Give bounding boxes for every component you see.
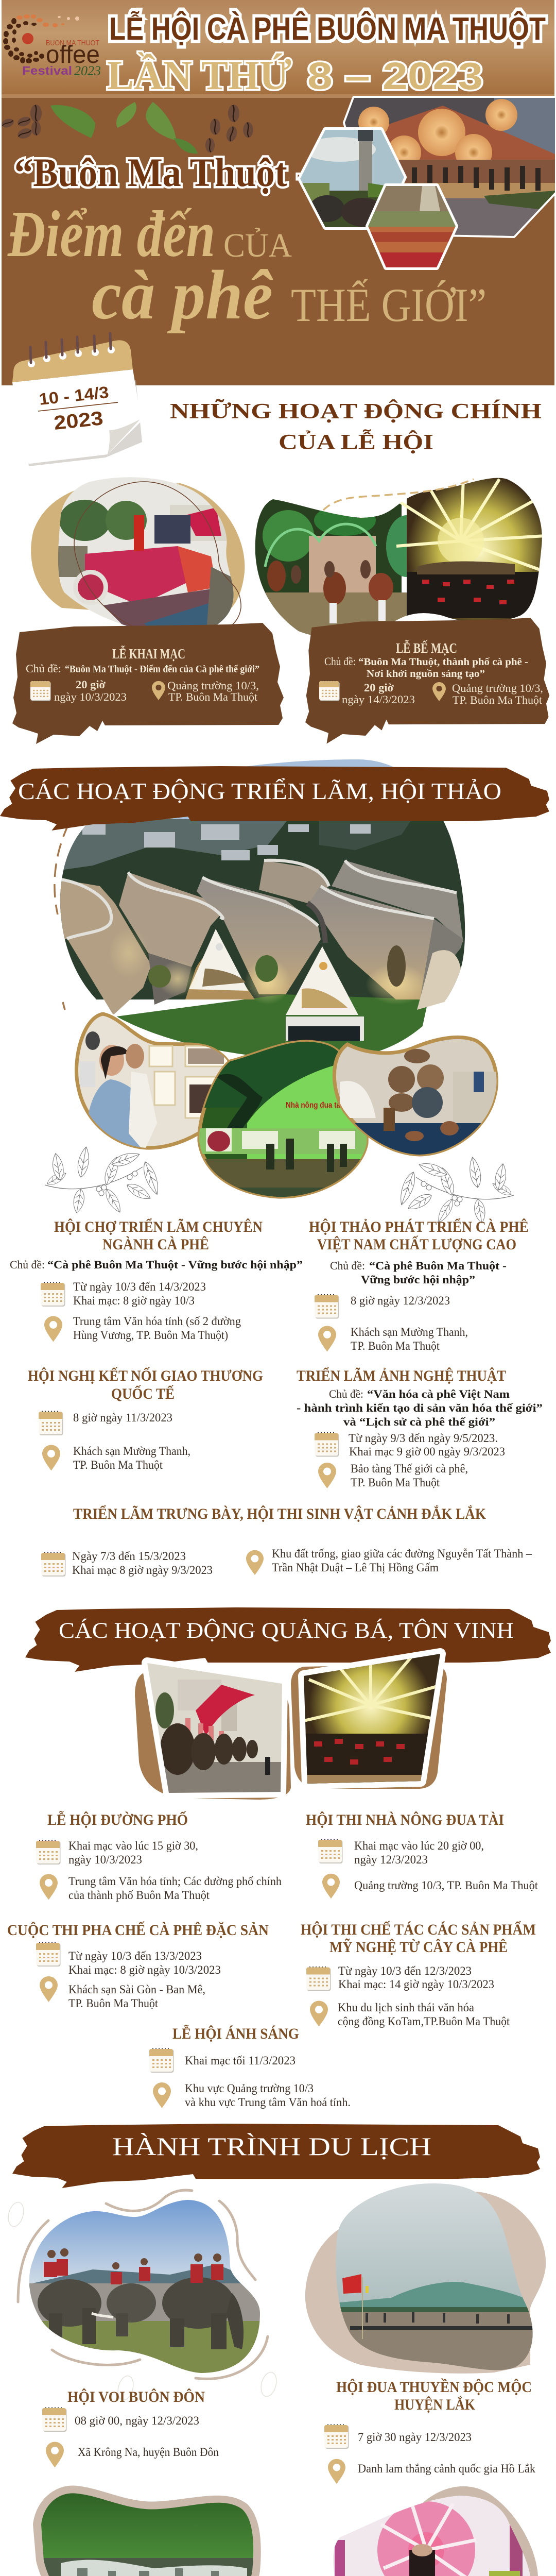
heading [28,1367,263,1402]
date [68,1839,198,1866]
photo: gallery visitors [77,1014,234,1154]
panel: Buon Don elephant festival [6,2190,279,2468]
location [68,1875,282,1902]
logo: Buon Ma Thuot Coffee Festival: offee [46,41,100,69]
dates [349,1432,505,1458]
location: Quảng trường 10/3, [452,682,543,694]
panel: Lak canoe race [305,2179,546,2484]
location: TP. Buôn Ma Thuột [453,693,542,706]
theme: “Văn hóa cà phê Việt Nam [367,1387,510,1400]
heading: main activities [170,399,542,454]
dates: Khai mạc 8 giờ ngày 9/3/2023 [72,1564,213,1577]
location [272,1547,532,1574]
caption theme [324,655,528,680]
icon: calendar [36,1840,61,1865]
photo: coffee museum [55,757,468,1066]
heading: LỄ HỘI ĐƯỜNG PHỐ [47,1811,188,1828]
location: TP. Buôn Ma Thuột [351,1340,440,1352]
caption banner [12,623,284,744]
heading: HỘI VOI BUÔN ĐÔN [67,2388,205,2405]
caption theme [26,662,259,675]
theme: “Cà phê Buôn Ma Thuột - Vững bước hội nhập” [47,1258,303,1271]
panel: farmers contest [306,1811,538,1899]
dates [73,1280,206,1307]
location [73,1445,190,1471]
photo: opening float [31,474,245,639]
icon: calendar [315,1294,339,1319]
slogan line 2: CỦA [223,227,292,264]
panel: specialty coffee contest [7,1921,269,2010]
heading: LỄ HỘI ÁNH SÁNG [172,2025,299,2042]
panel: Dam San opera [329,2486,538,2576]
icon: calendar [306,1967,331,1991]
photo: elephant race [6,2190,279,2402]
icon: calendar with date [12,333,142,466]
icon: location pin [322,1874,340,1899]
date: 20 giờ [76,678,106,691]
date: ngày 14/3/2023 [342,693,415,706]
location: TP. Buôn Ma Thuột [351,1476,440,1489]
icon: location pin [318,1326,336,1352]
date: Khai mạc tối 11/3/2023 [185,2054,296,2067]
panel: art photo exhibition [297,1367,543,1489]
dates: Khai mạc: 14 giờ ngày 10/3/2023 [338,1978,494,1991]
slogan line 2: Điểm đến [7,197,215,270]
logo: Buon Ma Thuot Coffee Festival [3,14,101,78]
icon: calendar [41,1552,66,1577]
icon: calendar [41,1282,65,1307]
location: Hùng Vương, TP. Buôn Ma Thuột) [73,1329,228,1342]
caption banner [305,618,549,744]
location: Khu đất trống, giao giữa các đường Nguyễn Tất Thành – [272,1547,532,1560]
location [452,682,543,706]
slogan line 1: “Buôn Ma Thuột - [14,150,309,195]
dates [72,1550,213,1577]
photo: closing stage [252,474,551,644]
dates: Từ ngày 10/3 đến 13/3/2023 [68,1950,202,1962]
section title: CÁC HOẠT ĐỘNG QUẢNG BÁ, TÔN VINH [59,1619,514,1643]
icon: location pin [153,2082,171,2108]
icon: calendar [30,681,51,701]
section banner: tourism journey [12,2124,540,2188]
heading: VIỆT NAM CHẤT LƯỢNG CAO [317,1235,516,1253]
date: Khai mạc vào lúc 20 giờ 00, [354,1839,484,1852]
theme: và “Lịch sử cà phê thế giới” [343,1415,495,1428]
date [342,681,415,706]
caption theme: “Buôn Ma Thuột, thành phố cà phê - [358,656,528,668]
date: 8 giờ ngày 12/3/2023 [351,1294,450,1307]
section banner: exhibitions and seminars [0,766,549,831]
panel: opening ceremony [12,474,284,744]
date: 08 giờ 00, ngày 12/3/2023 [75,2414,199,2427]
date [54,678,127,703]
heading: HỘI CHỢ TRIỂN LÃM CHUYÊN [54,1218,263,1235]
location: TP. Buôn Ma Thuột [168,690,257,703]
dates: Khai mạc: 8 giờ ngày 10/3/2023 [68,1963,221,1976]
panel: closing ceremony [252,474,551,744]
heading: MỸ NGHỆ TỪ CÂY CÀ PHÊ [329,1938,508,1956]
location [68,1983,205,2010]
theme [297,1387,543,1428]
heading [301,1921,536,1956]
logo: Buon Ma Thuot Coffee Festival: 2023 [74,63,101,78]
location: Trung tâm Văn hóa tỉnh; Các đường phố chính [68,1875,282,1888]
icon: calendar [36,1942,61,1967]
year: 2023 [53,408,104,434]
photo: festival hexagon [366,185,458,268]
panel: coffee wood handicraft contest [301,1921,536,2028]
section title: CÁC HOẠT ĐỘNG TRIỂN LÃM, HỘI THẢO [18,777,501,804]
caption title: LỄ BẾ MẠC [396,640,457,656]
theme: “Cà phê Buôn Ma Thuột - [369,1259,507,1272]
location: Xã Krông Na, huyện Buôn Đôn [78,2446,219,2459]
icon: location pin [44,1316,62,1342]
heading: main activities: NHỮNG HOẠT ĐỘNG CHÍNH [170,399,542,423]
heading: HUYỆN LẮK [394,2396,476,2413]
location [351,1462,468,1489]
logo: Buon Ma Thuot Coffee Festival: BUON MA THUOT [46,39,99,47]
date: 8 giờ ngày 11/3/2023 [73,1411,172,1424]
dates: Từ ngày 10/3 đến 12/3/2023 [338,1964,472,1977]
dates: Khai mạc: 8 giờ ngày 10/3 [73,1294,195,1307]
theme: Chủ đề: [329,1387,363,1400]
location: Quảng trường 10/3, [167,679,259,692]
panel: street festival [36,1811,282,1902]
location: Khách sạn Mường Thanh, [73,1445,190,1458]
heading: TRIỂN LÃM TRƯNG BÀY, HỘI THI SINH VẬT CẢNH ĐẮK LẮK [73,1505,486,1522]
icon: calendar [39,1411,63,1435]
location: Khách sạn Sài Gòn - Ban Mê, [68,1983,205,1996]
location: Khách sạn Mường Thanh, [351,1326,468,1338]
location: TP. Buôn Ma Thuột [73,1459,163,1471]
theme [330,1259,507,1286]
logo: Buon Ma Thuot Coffee Festival: Festival [22,64,72,77]
icon: calendar [149,2048,174,2073]
caption title: LỄ KHAI MẠC [112,646,185,662]
panel: bonsai exhibition [41,1505,532,1577]
icon: location pin [246,1550,264,1575]
panel: seminar on high quality coffee [309,1218,529,1352]
heading: TRIỂN LÃM ẢNH NGHỆ THUẬT [297,1367,506,1384]
location: Khu du lịch sinh thái văn hóa [338,2001,474,2014]
location: Bảo tàng Thế giới cà phê, [351,1462,468,1475]
dates [68,1950,221,1976]
date: ngày 10/3/2023 [54,690,127,703]
photo: farmers contest show [291,1643,447,1789]
icon: calendar [319,681,340,701]
location [167,679,259,703]
location: và khu vực Trung tâm Văn hoá tỉnh. [185,2096,351,2109]
date: ngày 10/3/2023 [68,1853,142,1866]
caption theme: Nơi khởi nguồn sáng tạo” [367,668,485,680]
section banner: promotion and honouring [25,1607,551,1672]
location: Khu vực Quảng trường 10/3 [185,2082,314,2095]
icon: location pin [432,682,446,701]
panel: header [1,0,556,385]
location: TP. Buôn Ma Thuột [68,1997,159,2010]
date: 7 giờ 30 ngày 12/3/2023 [358,2431,472,2444]
heading: HỘI THẢO PHÁT TRIỂN CÀ PHÊ [309,1218,529,1235]
photo: farmers contest stage [196,1041,371,1200]
decoration: coffee branch right [397,1156,514,1225]
photo: farmers contest stage: Nhà nông đua tài [286,1101,342,1110]
icon: location pin [40,1874,58,1900]
panel: light festival [149,2025,351,2109]
heading: HỘI THI NHÀ NÔNG ĐUA TÀI [306,1811,504,1828]
caption theme: “Buôn Ma Thuột - Điểm đến của Cà phê thế giới” [65,664,259,675]
photo: canoe race [305,2179,546,2374]
photo: street festival elephants [135,1659,291,1800]
heading [309,1218,529,1253]
theme: Chủ đề: [10,1258,45,1271]
location: của thành phố Buôn Ma Thuột [68,1889,210,1902]
location [338,2001,510,2028]
icon: calendar [324,2425,349,2449]
heading: HỘI ĐUA THUYỀN ĐỘC MỘC [336,2378,532,2396]
dates: Khai mạc 9 giờ 00 ngày 9/3/2023 [349,1445,505,1458]
dates: Ngày 7/3 đến 15/3/2023 [72,1550,186,1563]
photo: gong stage hexagon [340,98,556,240]
heading: HỘI NGHỊ KẾT NỐI GIAO THƯƠNG [28,1367,263,1384]
heading [54,1218,263,1253]
location: Danh lam thắng cảnh quốc gia Hồ Lắk [358,2462,535,2475]
dates: Từ ngày 9/3 đến ngày 9/5/2023. [349,1432,498,1445]
icon: location pin [318,1463,336,1488]
heading: QUỐC TẾ [111,1385,175,1402]
dates: Từ ngày 10/3 đến 14/3/2023 [73,1280,206,1293]
icon: calendar [318,1839,343,1863]
location [73,1315,241,1342]
date [354,1839,484,1866]
section title: HÀNH TRÌNH DU LỊCH [112,2132,431,2161]
dates [338,1964,494,1991]
title line 2: LẦN THỨ [107,52,291,98]
title line 2: 8 – 2023 [307,55,483,97]
heading: NGÀNH CÀ PHÊ [102,1236,209,1253]
photo: elephants hexagon [299,129,407,232]
icon: location pin [328,2459,345,2484]
icon: location pin [152,681,165,700]
heading: CUỘC THI PHA CHẾ CÀ PHÊ ĐẶC SẢN [7,1921,269,1939]
icon: location pin [310,2001,328,2027]
decoration: coffee beans and leaves [1,102,253,154]
location [185,2082,351,2109]
date: Khai mạc vào lúc 15 giờ 30, [68,1839,198,1852]
decoration: coffee branch left [45,1146,162,1214]
icon: location pin [46,2442,64,2468]
icon: calendar [315,1432,339,1457]
location: cộng đồng KoTam,TP.Buôn Ma Thuột [338,2015,510,2028]
panel: experience tours [8,2485,317,2576]
heading: HỘI THI CHẾ TÁC CÁC SẢN PHẨM [301,1921,536,1938]
location: Trung tâm Văn hóa tỉnh (số 2 đường [73,1315,241,1328]
heading: main activities: CỦA LỄ HỘI [279,429,433,454]
panel: coffee trade fair [10,1218,303,1342]
panel: international trade conference [28,1367,263,1471]
photo: rafting waterfall [33,2485,261,2576]
location: Trần Nhật Duật – Lê Thị Hồng Gấm [272,1561,439,1574]
slogan line 3 [92,257,486,334]
caption theme: Chủ đề: [324,655,356,668]
photo: opera stage [329,2486,538,2576]
title line 2 [107,52,483,98]
location: Quảng trường 10/3, TP. Buôn Ma Thuột [354,1879,538,1892]
icon: location pin [40,1976,58,2002]
date: 20 giờ [364,681,394,694]
theme: Chủ đề: [330,1259,365,1272]
date range: 10 - 14/3 [38,383,110,409]
icon: calendar [42,2407,67,2432]
theme: Vững bước hội nhập” [361,1273,475,1286]
caption theme: Chủ đề: [26,662,61,675]
slogan line 3: THẾ GIỚI” [291,279,486,331]
icon: location pin [42,1445,60,1470]
location [351,1326,468,1352]
theme: - hành trình kiến tạo di sản văn hóa thế giới” [297,1401,543,1414]
photo: coffee exhibits [334,1037,499,1159]
slogan line 3: cà phê [92,257,273,334]
date: ngày 12/3/2023 [354,1853,428,1866]
heading [336,2378,532,2413]
